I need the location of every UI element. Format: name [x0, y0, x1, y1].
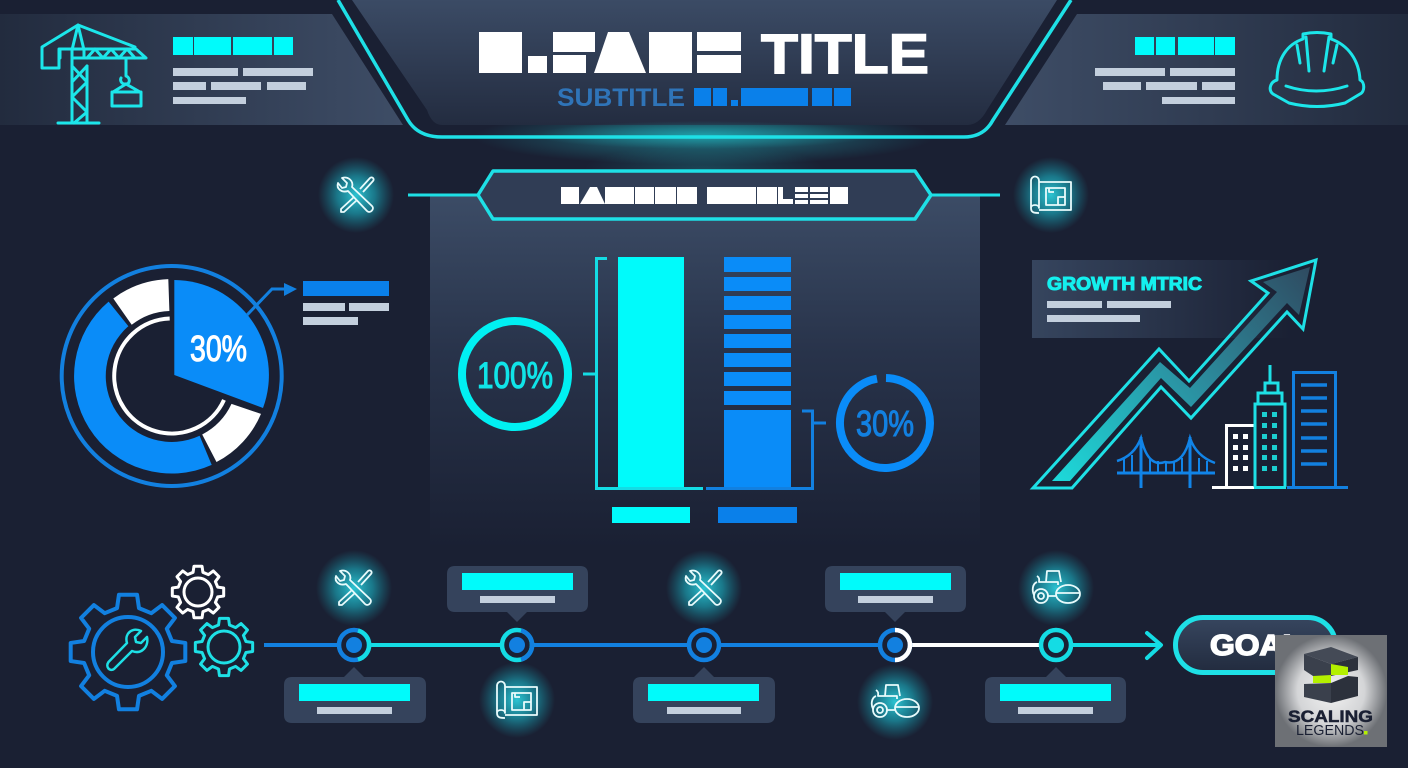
logo: Scaling Legends — [1275, 635, 1387, 747]
stat circle: 30% — [840, 378, 930, 468]
node 4 — [880, 630, 910, 660]
callout lines — [303, 303, 389, 325]
subtitle blocks — [694, 88, 851, 106]
arrow head — [1147, 633, 1161, 658]
growth arrow — [1033, 260, 1316, 488]
callout: step 4 — [825, 566, 966, 622]
title panel — [338, 0, 1071, 165]
bar: cyan 100% — [618, 257, 684, 488]
text lines — [173, 68, 313, 104]
gear: small cyan — [195, 618, 253, 676]
building: blue — [1287, 372, 1348, 488]
bar label: blue — [718, 507, 797, 523]
icon: blueprint top — [1013, 157, 1089, 233]
panel lines — [1047, 301, 1171, 322]
logo text: SCALING — [1288, 708, 1373, 726]
node 3 — [689, 630, 719, 660]
central chart panel — [408, 144, 1000, 548]
callout: step 1 — [284, 667, 426, 723]
bracket: cyan — [583, 258, 703, 488]
stat circle: 30%: 30% — [856, 403, 914, 444]
icon: tools top — [318, 157, 394, 233]
goal text: GOAL — [1210, 630, 1302, 662]
segment: white bottom — [202, 404, 261, 462]
icon: tools step 3 — [666, 550, 742, 626]
goal pill — [1176, 618, 1336, 672]
banner blocks — [561, 187, 848, 204]
bar: blue segmented 30% — [724, 257, 791, 488]
timeline — [264, 630, 1161, 660]
icon: road roller step 4 — [857, 664, 933, 740]
callout heading — [303, 281, 389, 296]
subtitle text: SUBTITLE — [557, 84, 685, 112]
stat circle: 100% — [462, 321, 568, 427]
heading blocks — [173, 37, 293, 55]
title frame line — [338, 0, 1071, 137]
donut chart — [62, 266, 282, 486]
building: cyan tower — [1254, 365, 1286, 488]
icon: wrench — [107, 630, 147, 670]
icon: road roller step 5 — [1018, 550, 1094, 626]
donut callout — [247, 281, 389, 325]
icon: hard hat — [1270, 32, 1364, 106]
outer ring — [62, 266, 282, 486]
gear: large blue — [71, 595, 185, 709]
header panel: right — [1005, 14, 1408, 125]
bar label: cyan — [612, 507, 690, 523]
gear: small white — [172, 566, 224, 618]
stat circle: 100%: 100% — [477, 355, 553, 396]
bracket: blue — [706, 411, 826, 488]
icon: bridge — [1117, 437, 1215, 488]
donut value: 30% — [190, 328, 247, 369]
panel heading: GROWTH MTRIC — [1047, 274, 1202, 294]
header panel: left — [0, 14, 403, 125]
title text: TITLE — [761, 22, 929, 85]
icon: city buildings — [1212, 365, 1348, 488]
inner ring — [114, 318, 224, 433]
timeline line — [264, 643, 1160, 647]
icon: tools step 1 — [316, 550, 392, 626]
segment: large blue — [74, 302, 212, 474]
segment: white top — [113, 279, 169, 325]
callout: step 2 — [447, 566, 588, 622]
node 2 — [502, 630, 532, 660]
logo dot — [1364, 731, 1368, 734]
logo mark — [1304, 647, 1358, 703]
banner — [408, 171, 1000, 219]
icon: blueprint step 2 — [479, 662, 555, 738]
building: white — [1212, 426, 1254, 488]
callout: step 5 — [985, 667, 1126, 723]
heading blocks — [1135, 37, 1235, 55]
growth metric panel — [1032, 260, 1292, 338]
node 5 — [1041, 630, 1071, 660]
icon: gears — [71, 566, 253, 709]
callout: step 3 — [633, 667, 775, 723]
arrow — [247, 283, 297, 315]
icon: tower crane — [42, 25, 146, 123]
text lines — [1095, 68, 1235, 104]
node 1 — [339, 630, 369, 660]
logo: Scaling Legends: LEGENDS — [1296, 722, 1364, 739]
segment: 30% wedge — [174, 280, 269, 408]
title blocks — [479, 32, 741, 73]
